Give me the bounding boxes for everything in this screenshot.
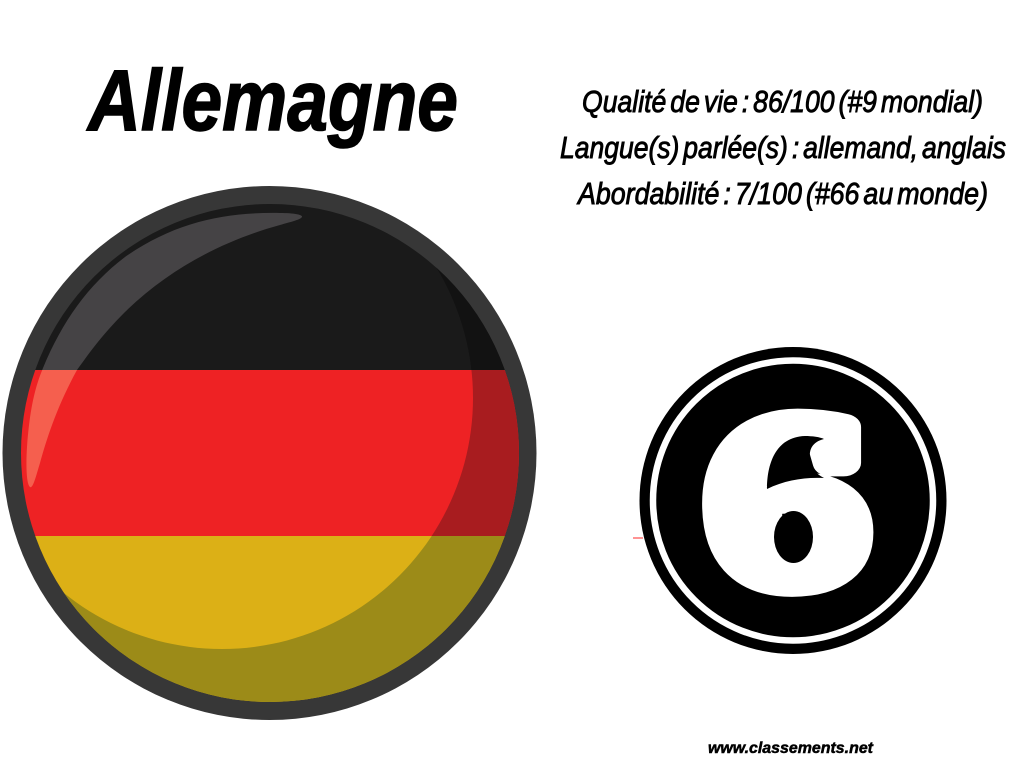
crescent shadow — [64, 269, 519, 702]
rank number: 6 — [709, 367, 865, 633]
icon: German flag button — [0, 186, 540, 720]
icon: rank badge number 6 — [640, 347, 946, 654]
button outer ring — [2, 186, 536, 720]
number counter — [774, 511, 813, 563]
glossy highlight — [20, 205, 310, 495]
faint red mark — [633, 537, 643, 539]
footer website: www.classements.net — [708, 740, 874, 757]
number notch — [767, 436, 824, 489]
title: Allemagne — [86, 53, 458, 149]
badge disc — [640, 347, 946, 654]
badge white ring — [653, 360, 933, 640]
text block: country facts — [560, 84, 1006, 211]
flag stripes — [21, 204, 519, 702]
